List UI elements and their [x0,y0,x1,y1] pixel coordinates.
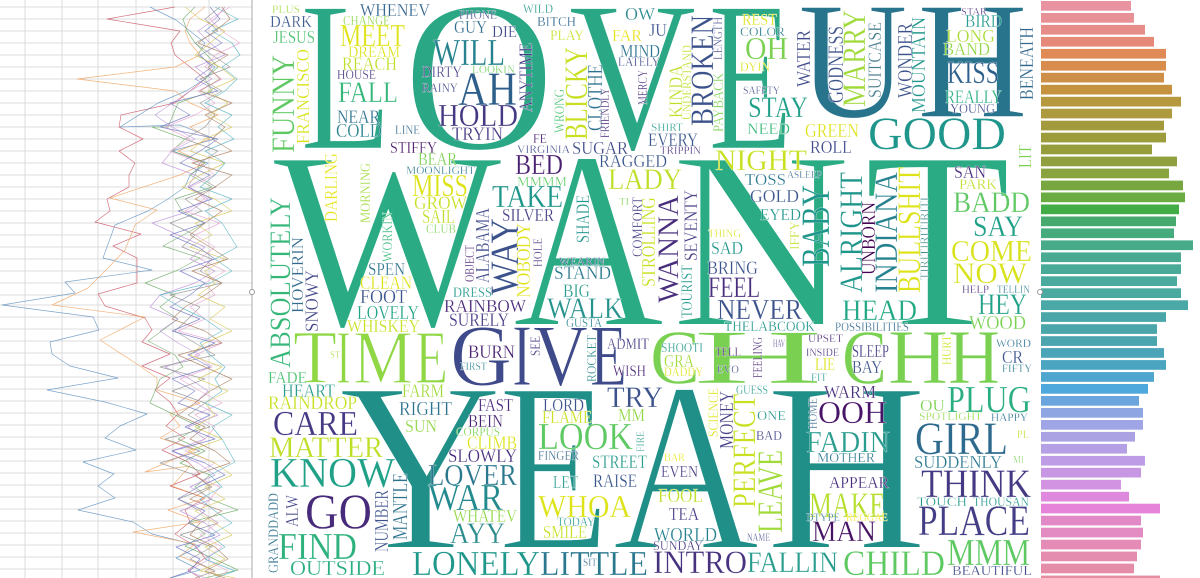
small words: upper centre: TRIPPIN [660,143,701,157]
small words: upper left: FRANCISCO [293,49,313,144]
small words: upper right: BIRD [965,11,1002,31]
small words: lower centre: SHOOTI [661,341,703,356]
small words: lower right: HOME [805,398,820,429]
small words: upper centre: OH [745,30,788,66]
small words: upper centre: UNDERSTAND [679,45,694,120]
small words: lower centre: FEELING [751,337,766,378]
small words: lower right: CR [1002,347,1023,367]
small words: upper left: MEET [340,17,405,53]
panel: spreadsheet line chart [0,0,252,578]
small words: upper left: GROW [414,193,467,214]
small words: upper centre: SHADE [573,195,594,243]
small words: lower left: BURN [468,342,515,363]
small words: upper left: PLUS [272,2,300,16]
small words: lower centre: GUESS [736,382,768,397]
small words: upper left: WORKIN [380,212,396,262]
small words: lower right: FIFTY [1002,361,1032,375]
small words: upper centre: SILVER [502,205,554,225]
small words: lower right: LIE [815,354,835,374]
small words: upper centre: KINDA [666,65,687,118]
small words: upper right: WATER [793,29,815,87]
small words: upper right: KISS [947,54,999,90]
small words: upper centre: RAGGED [599,151,667,171]
small words: lower centre: PERFECT [727,394,763,508]
small words: upper right: STAR [961,6,988,18]
small words: lower centre: RAISE [593,471,637,492]
icon: right resize handle [1038,290,1042,294]
small words: lower right: THOUSAN [973,494,1030,509]
small words: upper centre [492,1,822,304]
small words: upper centre: SHIRT [651,120,684,134]
small words: lower right: REGGAE [846,510,888,524]
small words: lower centre: TOURIST [679,265,696,318]
small words: upper right: TIRITIRITIRITI [917,197,931,280]
small words: upper left: LOOKIN [472,62,515,76]
small words: lower left: BEIN [468,411,503,431]
small words: lower centre: FINGER [538,449,580,464]
small words: upper left: REACH [342,54,397,75]
small words: upper right: LONG [946,26,995,46]
small words: lower left: GRANDDADD [266,493,282,573]
small words: upper centre: BRING [707,258,758,279]
small words: lower centre: TODAY [557,514,596,529]
word: CHCHH: H [948,314,1000,400]
small words: upper right: BAND [943,39,990,59]
word: WANT: N [670,99,852,382]
small words: upper centre: WRONG [552,89,568,133]
small words: upper left: WHENEV [360,0,430,20]
panel: horizontal bar chart [1041,1,1193,578]
small words: lower left: CORPUS [456,424,500,439]
small words: upper centre: CLOTHE [583,64,607,131]
small words: upper right: GOOD [868,108,1006,160]
small words: lower right: MI [1013,455,1024,466]
small words: lower centre: NEVER [717,295,802,326]
small words: upper left: JESUS [273,27,315,47]
word: CHCHH: H [888,314,948,400]
small words: upper centre: TOSS [745,170,786,189]
small words: upper left: LOVELY [357,302,419,324]
small words: lower right: WOOD [969,312,1026,334]
small words: lower left: RIGHT [399,398,452,420]
small words: upper centre: SAD [711,238,743,258]
small words: lower centre: EVEN [661,462,698,481]
small words: upper right: ALRIGHT [834,172,870,293]
small words: lower centre: MM [618,405,645,425]
word: WANT: T [863,99,1012,382]
small words: upper left: DIRTY [422,64,462,81]
small words: upper left: GUY [454,17,487,37]
small words: lower centre: EVO [717,362,739,376]
small words: lower centre: GUSTA [566,315,603,330]
small words: lower left: SIT [583,555,598,569]
small words: upper right: BADD [953,186,1030,219]
small words: lower right: INSIDE [806,345,839,359]
small words: lower left: RAINDROP [268,393,357,414]
small words: lower centre: DADDY [664,364,703,379]
small words: lower centre: LET [553,472,578,492]
small words: upper centre: FE [533,132,547,147]
word: WANT: A [512,99,665,382]
small words: upper left: CLUB [426,221,456,236]
small words: lower centre: WHOA [538,488,631,524]
small words: lower right: HEY [978,288,1027,321]
small words: upper right: WONDER [893,23,917,98]
small words: lower left: FAST [478,395,513,415]
small words: upper left: DIE [492,22,517,41]
small words: lower left: CLIMB [467,433,517,454]
small words: lower centre: TRY [607,381,663,414]
small words: upper centre: OW [625,4,655,24]
small words: upper centre: PLAY [550,28,584,44]
small words: upper right: MOUNTAIN [908,17,930,113]
small words: upper left: RAINBOW [444,296,526,316]
small words: upper centre: BED [515,150,563,181]
small words: upper right: INDIANA [869,172,905,293]
word: WANT: W [272,99,503,382]
small words: lower left: GO [305,483,372,539]
small words: lower centre: LOOK [538,416,633,458]
small words: lower centre: ADMIT [607,336,649,353]
small words: upper left: SNOWY [302,270,323,332]
small words: lower left: MATTER [269,431,383,464]
small words: lower centre: ONE [757,409,786,424]
small words: upper left: MOONLIGHT [406,163,476,177]
small words: upper left: AH [458,63,517,116]
small words: upper left: CHANGE [343,14,390,29]
small words: upper centre: COLOR [740,24,785,39]
small words: upper left: BEAR [418,149,457,169]
small words: upper centre: SUGAR [572,138,628,158]
small words: lower right: UPSET [808,331,844,345]
small words: upper centre: FAR [612,26,643,45]
small words: lower left: FARM [402,381,444,402]
small words: upper left: CLEAN [360,273,412,294]
small words: upper right: SAY [973,210,1023,243]
small words: lower right: FADIN [806,424,890,459]
small words: lower right: OU [920,396,945,415]
word: CHCHH: H [693,314,823,400]
small words: lower left [266,342,1032,578]
small words: upper left: SPEN [368,259,405,279]
small words: lower centre: NAME [747,530,770,544]
small words: upper left: MISS [412,167,468,203]
small words: upper right: BULLSHIT [892,167,928,293]
word: CHCHH: C [650,314,700,400]
small words: lower right: MAN [812,515,876,548]
small words: lower right [773,288,1032,548]
small words: lower right: SLEEP [852,341,889,361]
small words: upper centre: JU [649,20,667,40]
small words: lower left: FIND [278,526,357,568]
small words: upper right: ROLL [810,137,852,157]
small words: upper right: LIT [1015,145,1035,168]
small words: upper centre: FRIENDLY [597,88,612,138]
small words: upper right: IFFY [788,221,803,250]
small words: lower right: APPEAR [829,473,890,492]
small words: upper left: WAY [482,218,527,295]
small words: lower right: POSSIBILITIES [835,319,909,334]
small words: upper centre: STROLLING [638,197,660,287]
small words: lower centre: SMILE [543,522,587,542]
small words: lower centre: ROCKET [585,335,600,382]
small words: lower right: HURT [939,335,954,365]
small words: lower centre: MONEY [716,391,738,449]
small words: lower left: NUMBER [371,490,393,552]
small words: lower right: TOUCH [917,494,967,509]
small words: upper centre: MMMM [517,175,568,190]
small words: upper centre: LADY [608,163,682,196]
small words: upper left [264,0,537,368]
small words: upper left: STIFFY [390,138,437,157]
small words: upper centre: TI [619,196,629,208]
small words: lower left: AYY [450,517,505,550]
small words: upper left: FOOT [360,286,407,308]
small words: upper centre: COMFORT [630,197,646,257]
small words: upper right: BABY [793,185,838,267]
small words: upper right: GREEN [805,120,859,142]
word: GIVE: E [590,308,627,405]
word: GIVE: I [512,308,532,405]
small words: lower centre: TELL [715,344,741,359]
small words: lower right: MOTHER [817,451,876,466]
small words: upper left: NEAR [337,107,380,128]
small words: upper right [788,6,1038,296]
small words: upper left: RAINY [422,80,459,95]
small words: lower right: MAKE [809,485,885,525]
small words: upper centre: STAND [554,263,611,284]
small words: upper centre: WANNA [652,195,685,303]
small words: lower centre: TEA [669,504,699,524]
small words: upper left: NOBODY [513,223,535,298]
small words: lower left: WHATEV [453,506,517,526]
panel: lyric word cloud [264,0,1038,578]
small words: lower centre: SEE [528,336,544,356]
small words: lower centre: FLAME [542,407,592,427]
small words: lower left: LOVER [428,457,517,492]
small words: lower right: WORD [996,336,1031,350]
small words: upper left: HOVERIN [288,237,307,313]
small words: lower left: SLOWLY [448,446,517,467]
small words: lower centre: GRA [664,351,694,371]
small words: upper centre: REST [742,10,778,29]
small words: lower centre: SUNDAY [653,539,703,554]
small words: lower centre: BAR [664,450,685,464]
small words: upper right: COME [951,233,1032,268]
small words: lower right: WARM [824,382,876,402]
small words: upper left: ABSOLUTELY [264,197,297,368]
small words: upper centre: FEEL [708,271,760,304]
small words: lower centre: FOOL [658,485,703,507]
small words: lower right: FIT [811,370,828,384]
small words: upper right: HELP [962,282,989,296]
small words: lower centre: BAD [756,429,782,444]
small words: upper left: ALABAMA [472,208,494,283]
small words: upper centre: VIRGINIA [517,142,570,156]
small words: upper left: FUNNY [266,55,302,153]
small words: lower left: CARE [273,404,358,443]
small words: upper centre: GOLD [750,186,799,206]
small words: lower centre: LORD [543,395,584,415]
small words: upper right: REALLY [945,87,1002,108]
word: TIME: I [336,316,351,400]
small words: upper right: YOUNG [950,102,995,117]
small words: upper centre: SAFETY [743,83,780,97]
word: TIME: T [293,316,337,400]
small words: lower centre: LEAVE [750,450,790,533]
small words: upper centre: EYED [760,205,801,224]
small words: lower right: OOH [818,394,887,430]
small words: lower right: PLUG [947,379,1031,421]
small words: upper centre: WEARIN [559,254,605,268]
small words: upper centre: MERCY [636,70,651,105]
word: TIME: M [353,316,413,400]
small words: upper right: PARK [959,177,997,193]
small words: upper left: WILL [433,32,505,74]
small words: upper centre: LENGTH [710,17,725,60]
small words: upper left: FALL [338,76,398,109]
small words: upper right: UNBORN [858,202,880,275]
small words: lower centre [528,265,815,554]
small words: upper left: DRESS [453,285,492,301]
small words: upper left: ANYTIME [516,43,537,112]
small words: upper left: PHONE [459,7,497,22]
small words: lower left: HEART [282,381,335,402]
small words: upper centre: TAKE [492,178,563,214]
small words: upper right: SUITCASE [865,22,886,98]
small words: lower right: BAY [852,357,882,377]
word: TIME: E [415,316,448,400]
small words: upper left: HOLD [438,97,518,133]
small words: upper centre: BLICKY [559,47,595,140]
small words: lower right: DTYPE [806,510,840,524]
small words: upper left: MORNING [358,163,374,223]
small words: lower centre: FIRE [633,431,647,452]
small words: upper left: SURELY [449,310,509,331]
small words: upper left: DARLING [321,153,341,222]
small words: lower left: ST [330,349,340,361]
small words: lower right: GIRL [915,413,1008,465]
small words: lower centre: STREET [592,452,647,473]
small words: lower centre: THELABCOOK [724,319,815,335]
small words: lower centre: WISH [613,363,646,380]
word: GIVE: G [450,308,512,405]
small words: upper centre: NIGHT [715,144,807,177]
small words: upper right: GODNESS [823,26,848,103]
small words: upper right: BENEATH [1016,27,1038,100]
small words: upper left: HOUSE [337,68,376,83]
small words: lower right: HAV [773,336,785,350]
word: GIVE: V [533,308,588,405]
small words: lower centre: SCIENCE [706,388,722,437]
small words: lower right: PLACE [918,498,1030,545]
small words: upper centre: BITCH [537,15,576,30]
small words: upper centre: NEED [747,121,790,138]
small words: lower left: ALW [282,495,302,527]
small words: upper right: NOW [953,257,1028,290]
small words: lower right: SUDDENLY [914,452,1002,472]
small words: lower left: FIRST [460,359,488,373]
small words: lower left: MANTLE [388,473,412,540]
small words: upper centre: STAY [748,91,808,124]
small words: upper left: DREAM [348,44,400,61]
small words: upper centre: THING [708,226,741,240]
small words: upper left: OBJECT [463,245,478,282]
small words: upper centre: HOLE [530,238,545,267]
small words: lower right: HEAD [842,294,917,327]
small words: upper left: WHISKEY [347,316,420,336]
small words: lower left: SUN [405,416,437,436]
small words: lower centre: WALK [547,292,623,325]
small words: upper left: TRYIN [452,124,503,145]
small words: upper centre: WILD [523,1,553,16]
small words: lower left: FADE [268,368,307,387]
small words: lower right: HAPPY [991,410,1028,424]
small words: upper right: TELLIN [997,282,1030,296]
small words: upper centre: LATELY [618,54,661,69]
small words: upper left: SAIL [422,206,455,228]
small words: upper centre: DYIN [740,59,771,74]
small words: upper left: LINE [395,122,420,137]
small words: upper centre: EVERY [648,130,698,151]
small words: lower left: KNOW [270,451,395,497]
small words: upper right: SAN [954,162,986,182]
small words: upper left: DARK [270,12,313,31]
small words: lower left: WAR [428,477,504,519]
small words: upper centre: BIG [563,281,590,302]
small words: lower right: SPOTLIGHT [919,409,983,423]
icon: left resize handle [250,290,254,294]
small words: upper centre: PAYBACK [711,73,727,132]
small words: upper centre: SEVENTY [681,190,702,261]
small words: lower right: THINK [921,461,1031,506]
small words: upper centre: ASLEEP [787,169,822,181]
small words: lower left: MMM [947,532,1030,574]
word: CHCHH: C [842,314,887,400]
small words: lower right: PL [1017,427,1029,441]
small words: lower centre: WORLD [654,524,717,546]
small words: upper left: COLD [336,120,382,142]
small words: upper centre: MIND [620,41,660,61]
